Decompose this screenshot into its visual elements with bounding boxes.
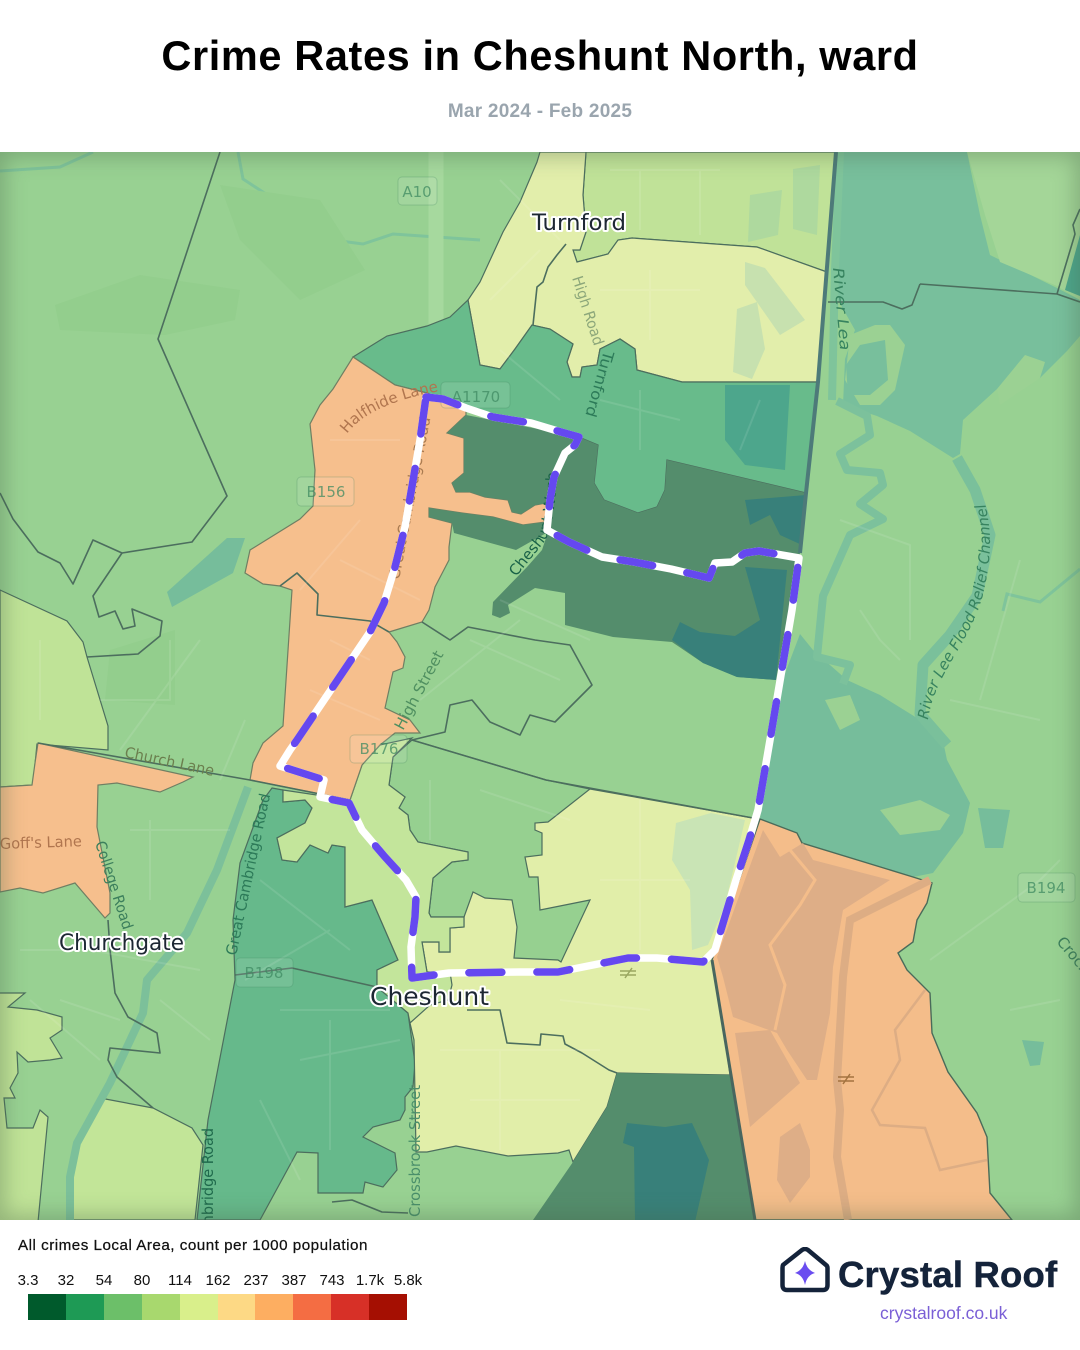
subtitle: date range: Mar 2024 - Feb 2025 bbox=[448, 101, 632, 122]
region boundary lines: Cheshunt south bbox=[467, 1010, 617, 1073]
wetland in north teal region bbox=[725, 385, 790, 470]
region: far west pale bbox=[0, 993, 62, 1222]
region: Turnford lakes north bbox=[748, 165, 820, 242]
road label: High Street: High Street bbox=[391, 648, 447, 733]
road label: Halfhide Lane: Halfhide Lane bbox=[340, 384, 438, 433]
title: Crime Rates in Cheshunt North, ward bbox=[161, 32, 919, 79]
icon: house with star bbox=[780, 1247, 830, 1292]
road label: Church Lane: Church Lane bbox=[123, 743, 216, 780]
region: central pale green band bbox=[277, 738, 468, 1023]
logo wordmark: Crystal Roof bbox=[838, 1254, 1057, 1295]
region: south-west pale bbox=[70, 1098, 203, 1220]
road label: Turnford: Turnford bbox=[581, 348, 618, 419]
A10 road strip bbox=[428, 152, 444, 400]
road shield: A10: A10 bbox=[402, 183, 432, 201]
road shield: B198: B198 bbox=[245, 964, 283, 982]
legend scale labels: 32 bbox=[58, 1272, 74, 1289]
road shield: A10 bbox=[398, 177, 437, 205]
legend scale labels: 3.3 bbox=[18, 1272, 38, 1289]
legend scale labels bbox=[18, 1272, 422, 1289]
region boundary lines bbox=[0, 152, 1080, 1220]
place label: Cheshunt: Cheshunt bbox=[370, 982, 489, 1011]
legend scale labels: 114 bbox=[168, 1272, 192, 1289]
legend scale labels: 54 bbox=[96, 1272, 112, 1289]
region: Turnford pale yellow bbox=[468, 152, 827, 382]
region: west pale bbox=[0, 590, 108, 787]
road shield: B176: B176 bbox=[360, 740, 398, 758]
road shield: B156 bbox=[297, 477, 354, 506]
rail stations bbox=[620, 968, 854, 1084]
legend scale labels: 5.8k bbox=[394, 1272, 422, 1289]
legend colour bar bbox=[28, 1294, 407, 1320]
region: north teal green bbox=[353, 300, 818, 513]
road shield: B194: B194 bbox=[1027, 879, 1065, 897]
road shield: A1170 bbox=[441, 382, 510, 408]
road shield: A1170: A1170 bbox=[452, 388, 500, 406]
road label: High Road: High Road bbox=[568, 274, 608, 348]
legend scale labels: 743 bbox=[319, 1272, 345, 1289]
faint street network bbox=[20, 170, 1060, 1180]
map edge vignette bbox=[0, 152, 1080, 1220]
legend scale labels: 1.7k bbox=[356, 1272, 384, 1289]
region: Turnford inner boundary bbox=[533, 244, 566, 325]
region boundary lines: orange ward inner bbox=[280, 573, 389, 632]
road shield: B176 bbox=[350, 735, 407, 763]
region: south dark green bbox=[533, 1073, 755, 1220]
water and wetland east bbox=[760, 152, 1080, 1066]
east orange wetlands bbox=[717, 830, 987, 1220]
teal wetland in dark region bbox=[672, 495, 806, 680]
region: Turnford lakes south bbox=[733, 262, 805, 379]
place label: Turnford: Turnford bbox=[531, 211, 626, 236]
road label: River Lea: River Lea bbox=[829, 267, 854, 351]
legend scale labels: 387 bbox=[281, 1272, 307, 1289]
region: Cheshunt south pale yellow bbox=[389, 740, 753, 1162]
road shield: B156: B156 bbox=[307, 483, 345, 501]
road shield: B194 bbox=[1018, 873, 1075, 902]
road label: Great Cambridge Road south: Great Cambridge Road bbox=[222, 792, 274, 957]
road label: Cheshunt Wash: Cheshunt Wash bbox=[510, 473, 556, 574]
region: south central green bbox=[197, 788, 415, 1220]
map: crime rate choropleth bbox=[0, 152, 1080, 1220]
region: Goff's Lane orange bbox=[0, 743, 193, 918]
region: central mid green bbox=[389, 740, 590, 962]
legend scale labels: 162 bbox=[205, 1272, 231, 1289]
region: dark green north bbox=[447, 415, 579, 514]
region: Halfhide orange bbox=[245, 357, 546, 800]
road label: Crossbrook Street: Crossbrook Street bbox=[406, 1085, 424, 1217]
road label: River Lee Flood Relief Channel: River Lee Flood Relief Channel bbox=[918, 506, 990, 720]
water and fields north-west bbox=[0, 152, 480, 705]
legend scale labels: 80 bbox=[134, 1272, 150, 1289]
website url: crystalroof.co.uk bbox=[880, 1303, 1007, 1323]
region: Turnford north pale green bbox=[573, 152, 836, 272]
road shield: B198 bbox=[236, 958, 293, 987]
legend title: All crimes Local Area, count per 1000 population bbox=[18, 1237, 368, 1254]
legend scale labels: 237 bbox=[243, 1272, 269, 1289]
place label: Churchgate: Churchgate bbox=[59, 931, 184, 956]
region: pale lake inside yellow area bbox=[672, 813, 745, 950]
region: dark green east bbox=[492, 438, 806, 680]
ward boundary: Cheshunt North bbox=[280, 397, 799, 978]
canal west bbox=[70, 787, 248, 1220]
road label: College Road: College Road bbox=[91, 839, 137, 932]
legend bbox=[18, 1237, 422, 1320]
road label: Goff's Lane: Goff's Lane bbox=[0, 832, 82, 853]
road label: Great Cambridge Road north: Great Cambridge Road bbox=[385, 415, 434, 581]
region: dark green strip bbox=[429, 508, 548, 550]
logo: Crystal Roof bbox=[780, 1247, 1058, 1323]
region: east orange bbox=[712, 819, 1012, 1220]
teal lake in south dark region bbox=[623, 1123, 709, 1222]
